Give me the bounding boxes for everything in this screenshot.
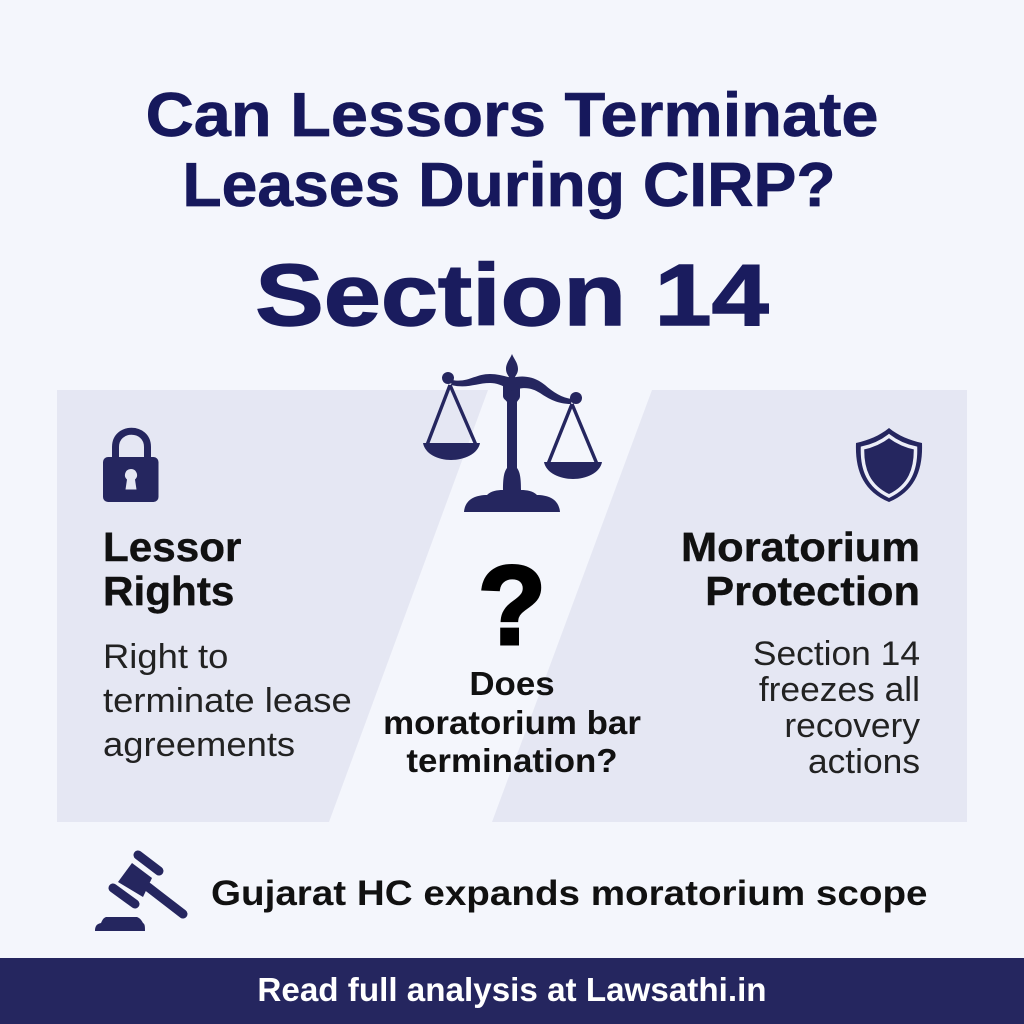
left panel heading	[103, 524, 241, 614]
icon: shield	[856, 428, 922, 502]
gavel base	[95, 917, 145, 931]
right panel body: recovery	[784, 707, 920, 745]
left panel body: Right to	[103, 638, 228, 676]
right panel body	[753, 635, 920, 781]
right panel heading: Protection	[705, 568, 920, 614]
title	[146, 81, 878, 220]
right panel body: freezes all	[759, 671, 920, 709]
right panel body: actions	[808, 743, 920, 781]
question mark: ?	[478, 543, 546, 668]
icon: padlock	[103, 428, 158, 502]
title: Can Lessors Terminate	[146, 81, 878, 150]
title: Leases During CIRP?	[182, 151, 836, 220]
verdict line: Gujarat HC expands moratorium scope	[211, 874, 928, 913]
left panel heading: Lessor	[103, 524, 241, 570]
icon: gavel	[95, 850, 188, 931]
icon: scales of justice	[423, 354, 602, 512]
section heading: Section 14	[255, 247, 769, 344]
centre question text: Does	[469, 665, 555, 702]
footer bar	[0, 958, 1024, 1024]
right panel heading	[681, 524, 920, 614]
left panel body: terminate lease	[103, 682, 352, 720]
right panel body: Section 14	[753, 635, 920, 673]
left panel body: agreements	[103, 726, 295, 764]
left panel heading: Rights	[103, 568, 234, 614]
centre question text: termination?	[406, 742, 618, 779]
left panel body	[103, 638, 352, 764]
centre question text: moratorium bar	[383, 704, 641, 740]
centre question text	[383, 665, 641, 779]
right panel heading: Moratorium	[681, 524, 920, 570]
footer text: Read full analysis at Lawsathi.in	[257, 971, 767, 1008]
